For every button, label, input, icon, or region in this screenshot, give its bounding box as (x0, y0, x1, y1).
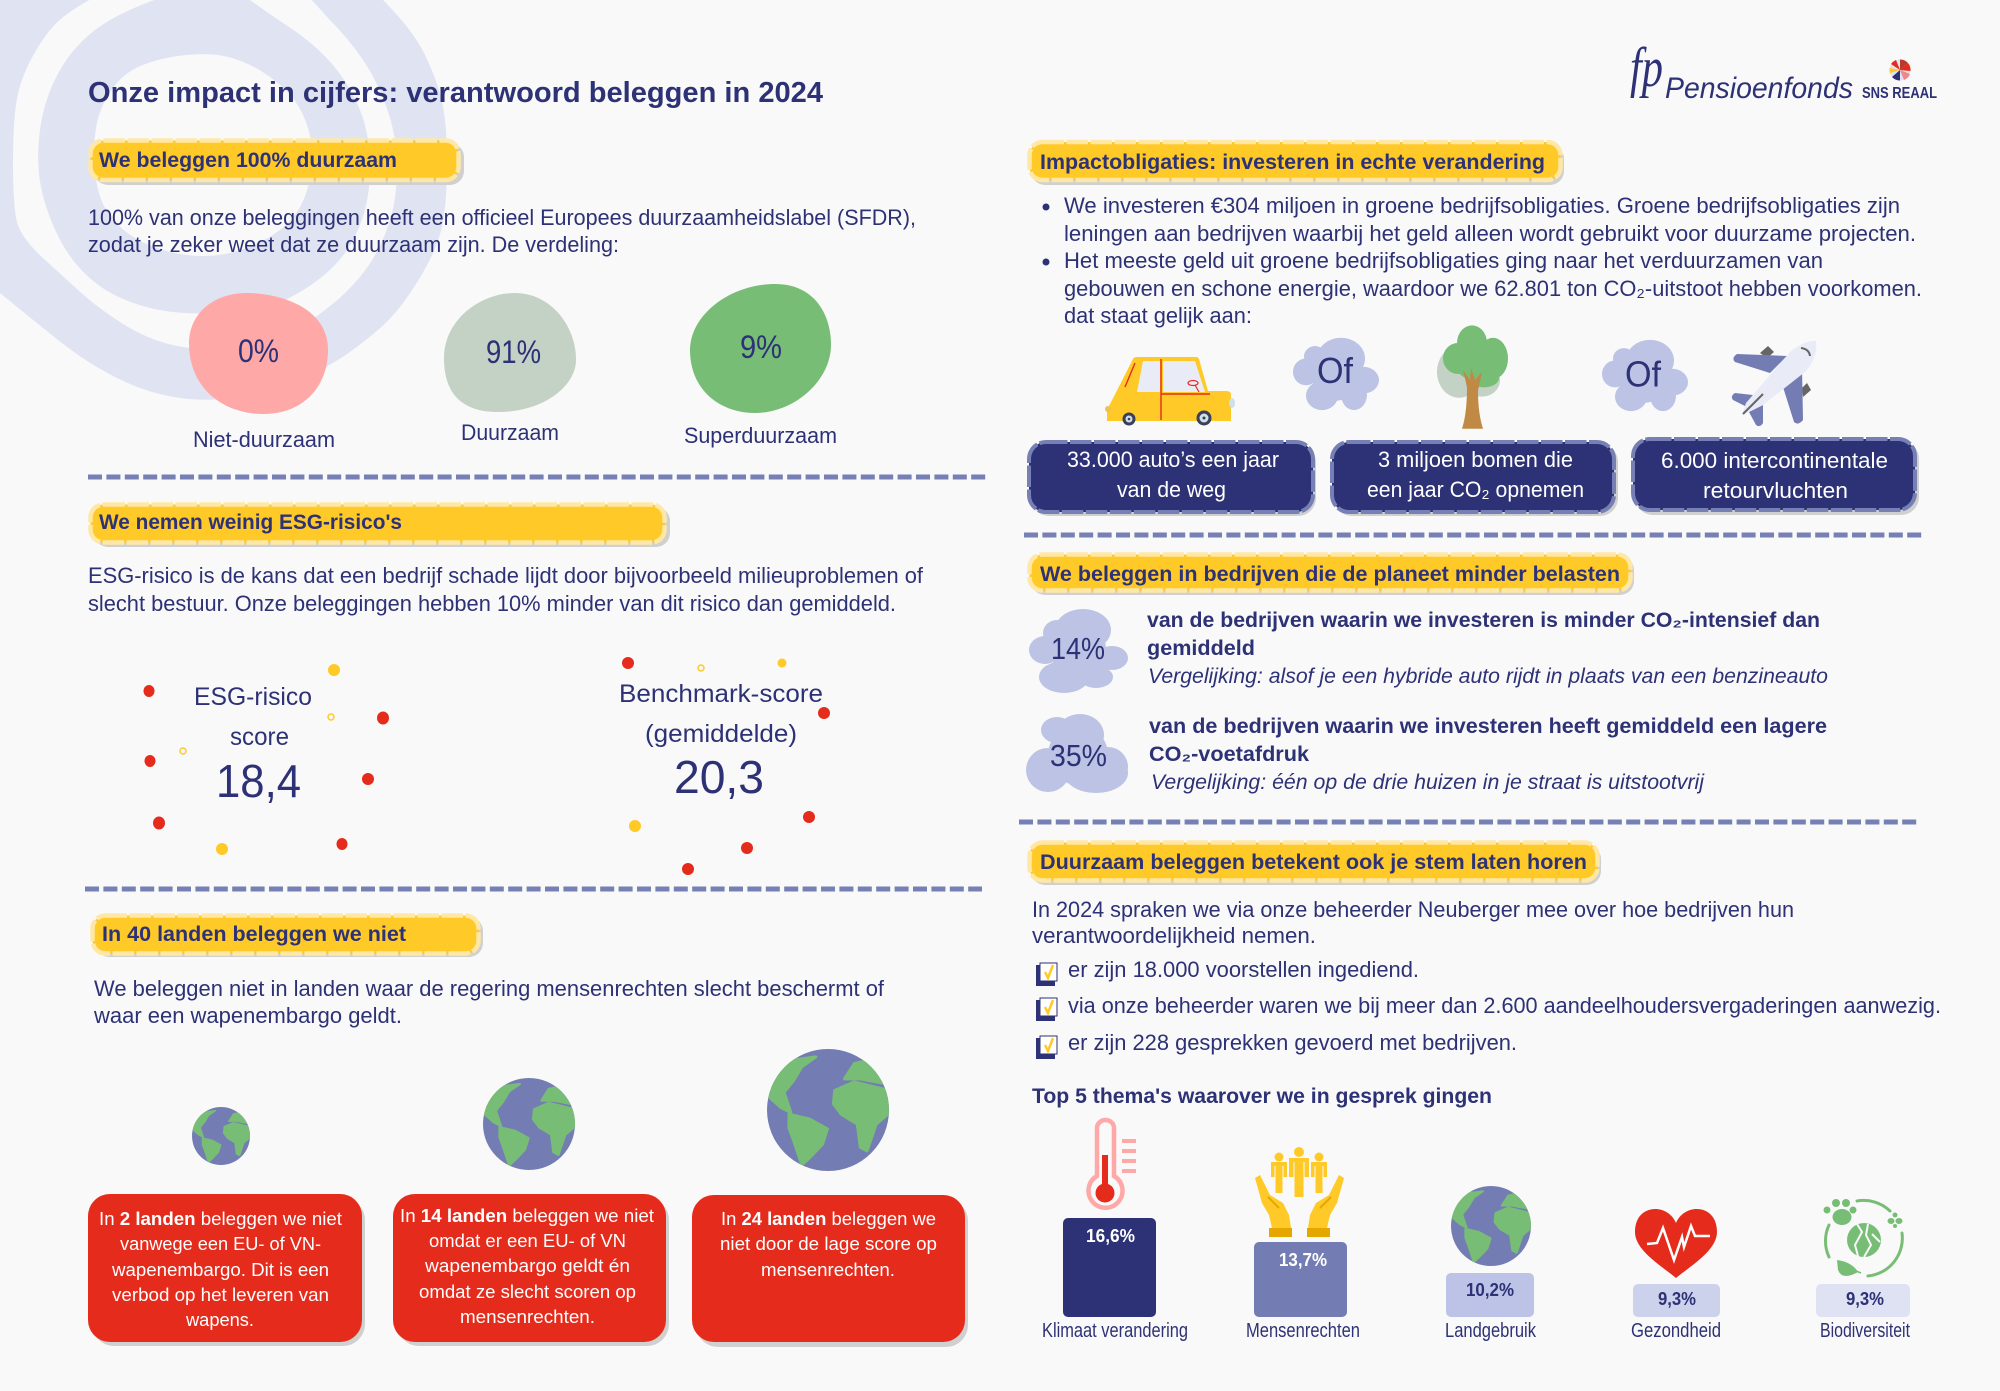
cloud: 14%: 14% (1051, 631, 1105, 666)
list item: 18.000 voorstellen: er zijn 18.000 voorstellen ingediend. (1068, 957, 1419, 982)
card: 24 landen (692, 1195, 968, 1347)
text block: ESG uitleg (88, 563, 924, 616)
card: 6.000 retourvluchten (1633, 439, 1919, 515)
card: 2 landen: vanwege een EU- of VN- (120, 1233, 321, 1254)
panel: in 40 landen beleggen we niet (88, 916, 968, 1347)
text block: ESG uitleg: slecht bestuur. Onze beleggingen hebben 10% minder van dit risico dan gemiddeld. (88, 591, 896, 616)
bar: mensenrechten 13,7% (1246, 1242, 1360, 1342)
text block: intro stem: verantwoordelijkheid nemen. (1032, 923, 1316, 948)
card: 14 landen: wapenembargo geldt én (424, 1255, 630, 1276)
heading: je stem laten horen: Duurzaam beleggen betekent ook je stem laten horen (1040, 851, 1587, 874)
bar: landgebruik 10,2%: Landgebruik (1445, 1320, 1537, 1342)
heading: planeet minder belasten (1030, 554, 1634, 595)
list item: 228 gesprekken: er zijn 228 gesprekken gevoerd met bedrijven. (1068, 1030, 1517, 1055)
heading: je stem laten horen (1030, 842, 1601, 885)
card: 33.000 auto's (1029, 442, 1316, 516)
text block: landen uitleg: We beleggen niet in landen waar de regering mensenrechten slecht beschermt of (94, 976, 885, 1001)
text block: landen uitleg: waar een wapenembargo geldt. (93, 1003, 402, 1028)
card: 14 landen (393, 1194, 669, 1346)
text block: intro SFDR: zodat je zeker weet dat ze duurzaam zijn. De verdeling: (88, 232, 619, 257)
heading: in 40 landen: In 40 landen beleggen we niet (102, 923, 406, 946)
blob: 9% superduurzaam (684, 284, 837, 448)
card: 6.000 retourvluchten: 6.000 intercontinentale (1661, 448, 1888, 473)
heading: impactobligaties: Impactobligaties: investeren in echte verandering (1040, 151, 1545, 174)
blob: 91% duurzaam: Duurzaam (461, 420, 559, 445)
logo: Pensioenfonds SNS REAAL: SNS REAAL (1862, 85, 1937, 102)
icon: airplane (1732, 341, 1816, 426)
heading: we beleggen 100% duurzaam (90, 140, 464, 185)
heading: we nemen weinig ESG-risico's: We nemen weinig ESG-risico's (99, 511, 402, 534)
stat: ESG-risico score 18,4: 18,4 (216, 755, 301, 807)
bar: gezondheid 9,3%: Gezondheid (1631, 1320, 1721, 1342)
icon: small globe (192, 1107, 250, 1165)
card: 33.000 auto's: van de weg (1117, 477, 1226, 502)
bar: biodiversiteit 9,3%: Biodiversiteit (1820, 1320, 1910, 1342)
card: 2 landen: verbod op het leveren van (112, 1284, 329, 1305)
heading: we nemen weinig ESG-risico's (90, 504, 670, 547)
text block: 14% minder CO2-intensief: Vergelijking: alsof je een hybride auto rijdt in plaats van een benzineauto (1148, 665, 1828, 688)
card: 33.000 auto's: 33.000 auto’s een jaar (1067, 447, 1279, 472)
text block: intro stem (1032, 897, 1794, 948)
stat: ESG-risico score 18,4: ESG-risico (194, 683, 312, 711)
cloud: 14% (1029, 609, 1128, 693)
panel: ESG-risico (88, 504, 924, 875)
text block: bullets groene obligaties (1042, 193, 1922, 328)
stat: benchmark-score 20,3: (gemiddelde) (645, 720, 797, 748)
text block: 35% lagere voetafdruk: CO₂-voetafdruk (1149, 743, 1309, 766)
stat: ESG-risico score 18,4 (144, 664, 389, 855)
bar: landgebruik 10,2%: 10,2% (1466, 1280, 1514, 1300)
bar: gezondheid 9,3% (1631, 1284, 1721, 1342)
icon: biodiversity (1824, 1199, 1902, 1276)
panel: impactobligaties (1029, 142, 1922, 516)
cloud: of (1293, 338, 1379, 410)
text block: ESG uitleg: ESG-risico is de kans dat een bedrijf schade lijdt door bijvoorbeeld milieuproblemen of (88, 563, 924, 588)
heading: impactobligaties (1030, 142, 1564, 185)
blob: 9% superduurzaam: 9% (740, 329, 782, 365)
title: Onze impact in cijfers: verantwoord beleggen in 2024 (88, 77, 823, 109)
panel: planeet minder belasten (1026, 554, 1828, 794)
text block: intro stem: In 2024 spraken we via onze beheerder Neuberger mee over hoe bedrijven hun (1032, 897, 1794, 922)
card: 24 landen: mensenrechten. (761, 1259, 895, 1280)
icon: car (1105, 357, 1235, 426)
text block: bullets groene obligaties: dat staat gelijk aan: (1064, 303, 1252, 328)
heading: we beleggen 100% duurzaam: We beleggen 100% duurzaam (99, 149, 397, 172)
card: 2 landen (88, 1194, 365, 1346)
icon: heart with pulse (1635, 1209, 1717, 1278)
logo: Pensioenfonds SNS REAAL: Pensioenfonds (1665, 72, 1853, 105)
bar: mensenrechten 13,7%: Mensenrechten (1246, 1320, 1360, 1342)
card: 2 landen: wapenembargo. Dit is een (111, 1259, 329, 1280)
bar: biodiversiteit 9,3% (1816, 1284, 1910, 1342)
stat: ESG-risico score 18,4: score (230, 723, 289, 751)
text block: landen uitleg (93, 976, 885, 1028)
heading: top 5 thema's: Top 5 thema's waarover we in gesprek gingen (1032, 1085, 1492, 1108)
text block: 14% minder CO2-intensief (1147, 609, 1828, 688)
text block: intro SFDR: 100% van onze beleggingen heeft een officieel Europees duurzaamheidslabel (SFDR), (88, 205, 916, 230)
background: concentric lavender rings (0, 0, 447, 400)
card: 3 miljoen bomen (1332, 442, 1618, 516)
bar: mensenrechten 13,7%: 13,7% (1279, 1250, 1327, 1270)
card: 3 miljoen bomen: een jaar CO₂ opnemen (1367, 477, 1584, 502)
card: 2 landen: wapens. (185, 1309, 254, 1330)
blob: 0% niet-duurzaam: 0% (238, 333, 279, 369)
card: 24 landen: In 24 landen beleggen we (721, 1208, 936, 1229)
icon: thermometer (1088, 1120, 1136, 1208)
text block: 35% lagere voetafdruk (1149, 715, 1827, 794)
text block: intro SFDR (88, 205, 916, 257)
text block: bullets groene obligaties: gebouwen en schone energie, waardoor we 62.801 ton CO₂-uitstoot hebben voorkomen. (1064, 276, 1922, 301)
icon: hands with people (1255, 1147, 1344, 1237)
stat: benchmark-score 20,3 (619, 657, 830, 875)
icon: large globe (767, 1049, 889, 1171)
blob: 91% duurzaam (444, 293, 576, 445)
bar: landgebruik 10,2% (1445, 1273, 1537, 1342)
bar: gezondheid 9,3%: 9,3% (1658, 1289, 1696, 1309)
chart: top 5 thema's (1042, 1120, 1910, 1342)
card: 2 landen: In 2 landen beleggen we niet (99, 1208, 342, 1229)
cloud: of: Of (1317, 351, 1353, 391)
text block: bullets groene obligaties: We investeren €304 miljoen in groene bedrijfsobligaties. Groene bedrijfsobligaties zijn (1064, 193, 1900, 218)
card: 14 landen: mensenrechten. (460, 1306, 595, 1327)
cloud: of: Of (1625, 354, 1661, 394)
icon: globe (1451, 1186, 1531, 1266)
blob: 0% niet-duurzaam: Niet-duurzaam (193, 427, 335, 452)
heading: planeet minder belasten: We beleggen in bedrijven die de planeet minder belasten (1040, 563, 1620, 586)
text block: 35% lagere voetafdruk: van de bedrijven waarin we investeren heeft gemiddeld een lagere (1149, 715, 1827, 738)
card: 14 landen: In 14 landen beleggen we niet (400, 1205, 654, 1226)
card: 6.000 retourvluchten: retourvluchten (1703, 478, 1848, 503)
panel: we beleggen 100% duurzaam (88, 140, 916, 452)
text block: 14% minder CO2-intensief: van de bedrijven waarin we investeren is minder CO₂-intensief dan (1147, 609, 1820, 632)
panel: je stem laten horen (1030, 842, 1941, 1342)
card: 3 miljoen bomen: 3 miljoen bomen die (1378, 447, 1573, 472)
bar: klimaat verandering 16,6% (1042, 1218, 1188, 1342)
stat: benchmark-score 20,3: 20,3 (674, 751, 764, 803)
card: 14 landen: omdat ze slecht scoren op (419, 1281, 636, 1302)
cloud: of (1602, 340, 1688, 411)
logo: Pensioenfonds SNS REAAL (1630, 37, 1937, 105)
bar: biodiversiteit 9,3%: 9,3% (1846, 1289, 1884, 1309)
text block: bullets groene obligaties: Het meeste geld uit groene bedrijfsobligaties ging naar het verduurzamen van (1064, 248, 1823, 273)
cloud: 35% (1026, 714, 1128, 793)
card: 14 landen: omdat er een EU- of VN (429, 1230, 626, 1251)
heading: in 40 landen (92, 916, 483, 957)
icon: tree (1437, 325, 1508, 429)
text block: 14% minder CO2-intensief: gemiddeld (1147, 637, 1255, 660)
cloud: 35%: 35% (1050, 738, 1107, 773)
logo: Pensioenfonds SNS REAAL: fp (1630, 37, 1663, 99)
text block: 35% lagere voetafdruk: Vergelijking: één op de drie huizen in je straat is uitstootvrij (1151, 771, 1705, 794)
card: 24 landen: niet door de lage score op (720, 1233, 937, 1254)
text block: bullets groene obligaties: leningen aan bedrijven waarbij het geld alleen wordt gebruikt voor duurzame projecten. (1064, 221, 1916, 246)
icon: medium globe (483, 1078, 575, 1170)
stat: benchmark-score 20,3: Benchmark-score (619, 680, 823, 708)
blob: 91% duurzaam: 91% (486, 334, 541, 370)
bar: klimaat verandering 16,6%: Klimaat verandering (1042, 1320, 1188, 1342)
list item: 2.600 vergaderingen: via onze beheerder waren we bij meer dan 2.600 aandeelhoudersvergaderingen aanwezig. (1068, 993, 1941, 1018)
blob: 0% niet-duurzaam (189, 293, 335, 452)
bar: klimaat verandering 16,6%: 16,6% (1086, 1226, 1135, 1246)
blob: 9% superduurzaam: Superduurzaam (684, 423, 837, 448)
